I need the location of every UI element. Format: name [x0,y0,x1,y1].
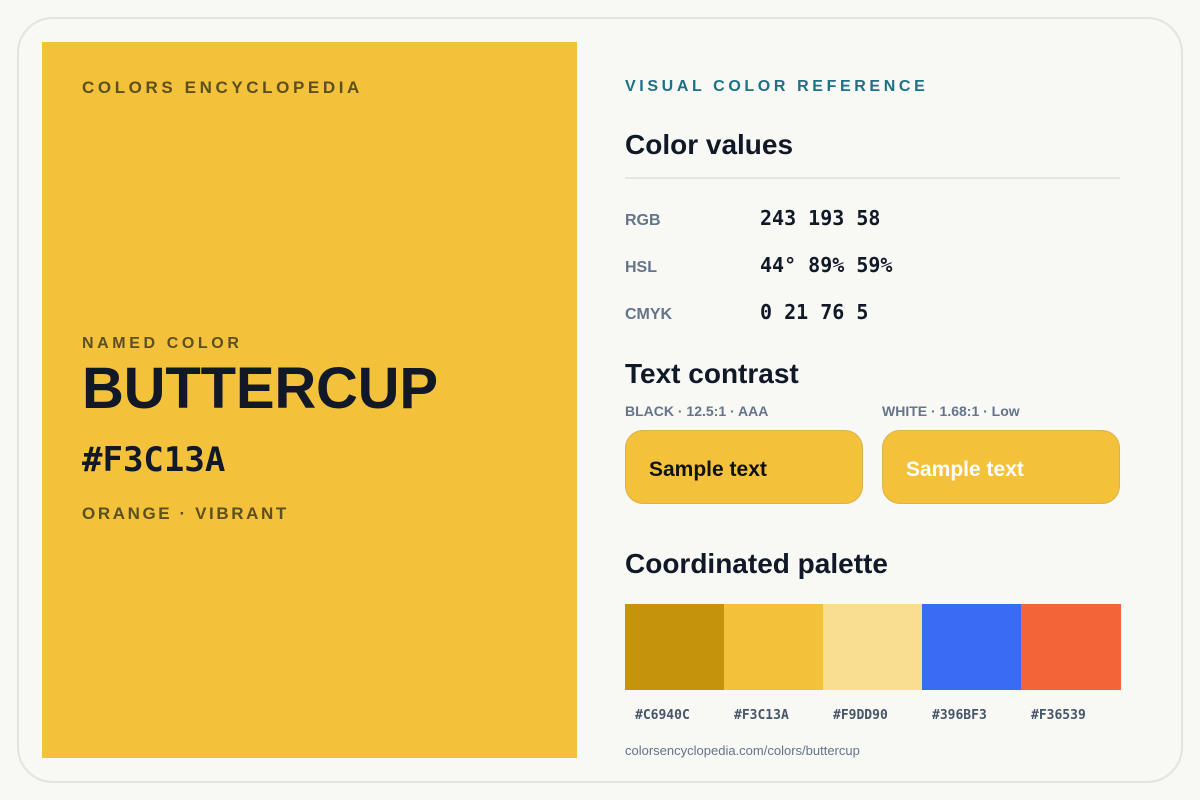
section eyebrow: VISUAL COLOR REFERENCE [625,78,928,95]
CMYK value: 0 21 76 5 [760,300,868,324]
CMYK row [625,300,868,324]
panel: color hero [42,42,577,758]
source url: colorsencyclopedia.com/colors/buttercup [625,743,860,758]
palette swatches [625,604,1121,690]
white sample [882,430,1120,504]
black contrast caption: BLACK · 12.5:1 · AAA [625,403,768,419]
color name: BUTTERCUP [82,356,438,421]
RGB value: 243 193 58 [760,206,880,230]
named color label: NAMED COLOR [82,335,242,352]
palette hex labels: #F3C13A [734,708,789,723]
palette hex labels [635,708,1086,723]
palette hex labels: #F9DD90 [833,708,888,723]
HSL row [625,253,892,277]
HSL label: HSL [625,259,657,276]
palette hex labels: #C6940C [635,708,690,723]
palette hex labels: #396BF3 [932,708,987,723]
RGB row [625,206,880,230]
heading: text contrast: Text contrast [625,358,799,389]
hex code: #F3C13A [82,440,225,480]
RGB label: RGB [625,212,661,229]
color family tags: ORANGE · VIBRANT [82,504,289,523]
CMYK label: CMYK [625,306,672,323]
white sample: Sample text [906,458,1024,481]
brand label: COLORS ENCYCLOPEDIA [82,78,363,97]
black sample [625,430,863,504]
palette hex labels: #F36539 [1031,708,1086,723]
heading: color values: Color values [625,129,793,160]
white contrast caption: WHITE · 1.68:1 · Low [882,403,1020,419]
HSL value: 44° 89% 59% [760,253,892,277]
black sample: Sample text [649,458,767,481]
heading: coordinated palette: Coordinated palette [625,548,888,579]
